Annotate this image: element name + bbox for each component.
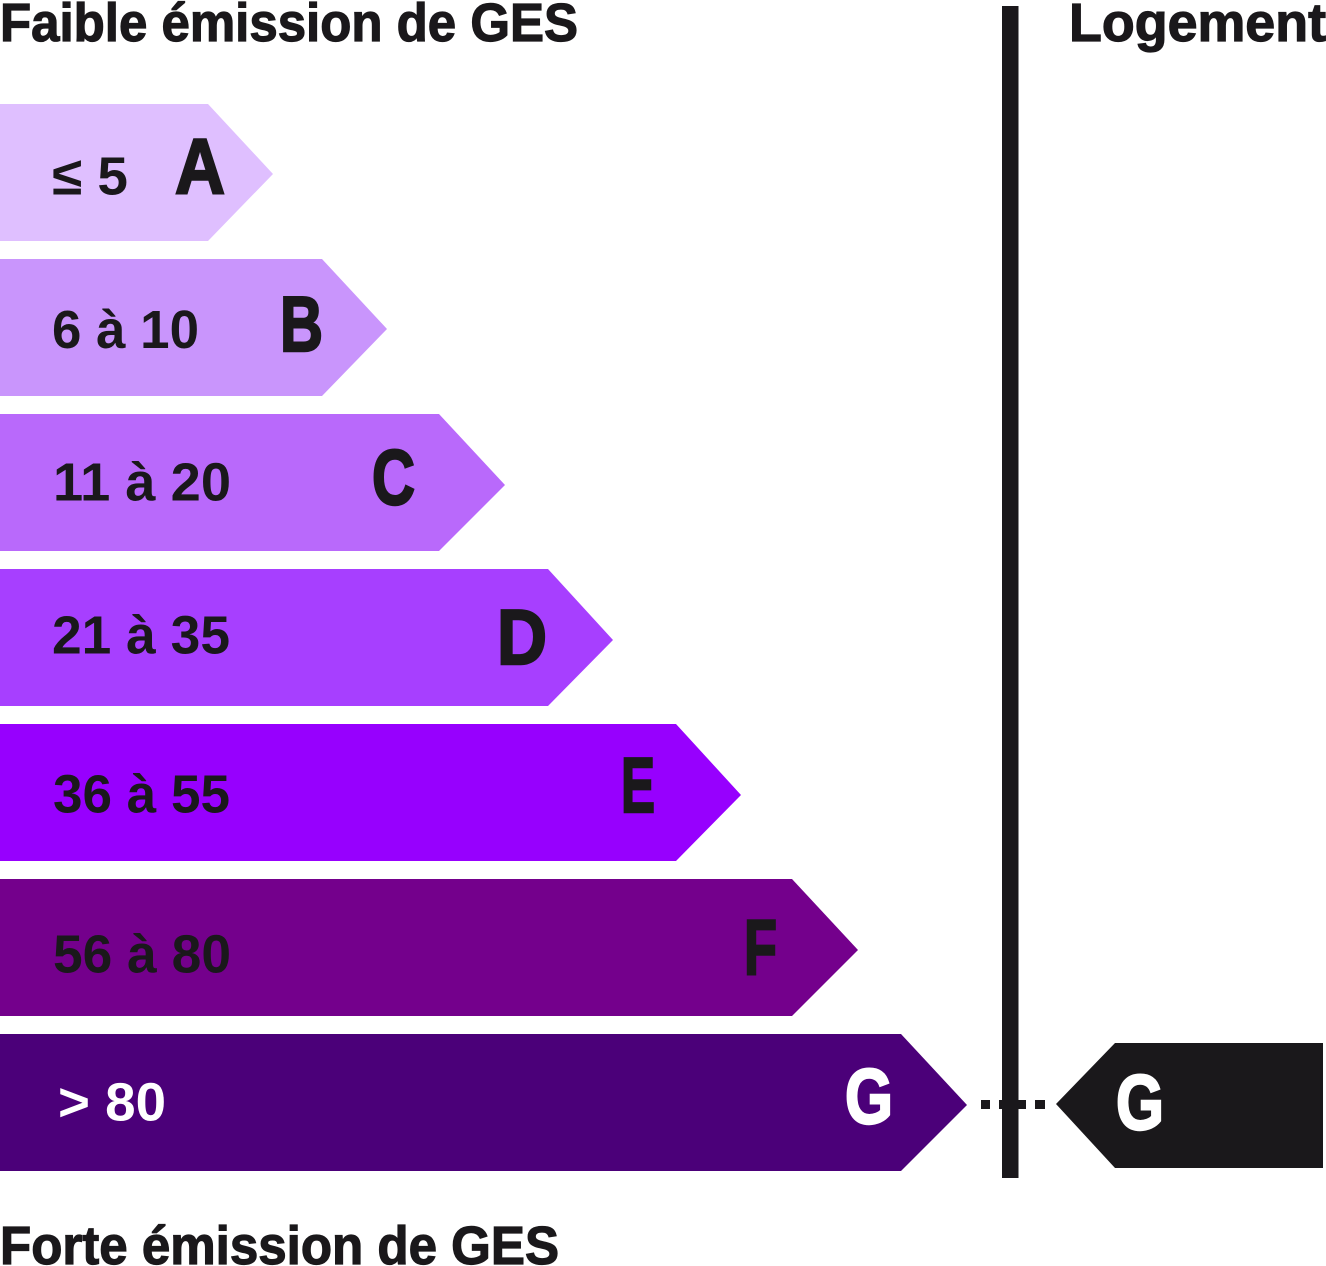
band A — [0, 104, 273, 241]
band D — [0, 569, 613, 706]
band A: A — [175, 122, 225, 210]
housing rating marker G: G — [1116, 1058, 1164, 1146]
band G — [0, 1034, 967, 1171]
band E: 36 à 55 — [53, 764, 230, 824]
band E — [0, 724, 741, 861]
band C — [0, 414, 505, 551]
band B: 6 à 10 — [52, 300, 199, 360]
band G: G — [845, 1052, 893, 1140]
band F: 56 à 80 — [53, 924, 231, 984]
band B: B — [280, 280, 323, 368]
band A: ≤ 5 — [52, 146, 128, 206]
band F — [0, 879, 858, 1016]
band D: D — [497, 593, 547, 681]
dotted connector — [981, 1100, 1045, 1109]
band G: > 80 — [58, 1072, 166, 1132]
band B — [0, 259, 387, 396]
band E: E — [621, 741, 655, 829]
housing rating marker G — [1056, 1043, 1323, 1168]
band C: C — [372, 433, 415, 521]
vertical divider — [1002, 6, 1018, 1178]
band F: F — [744, 903, 777, 991]
band D: 21 à 35 — [52, 606, 230, 666]
band C: 11 à 20 — [53, 452, 231, 512]
